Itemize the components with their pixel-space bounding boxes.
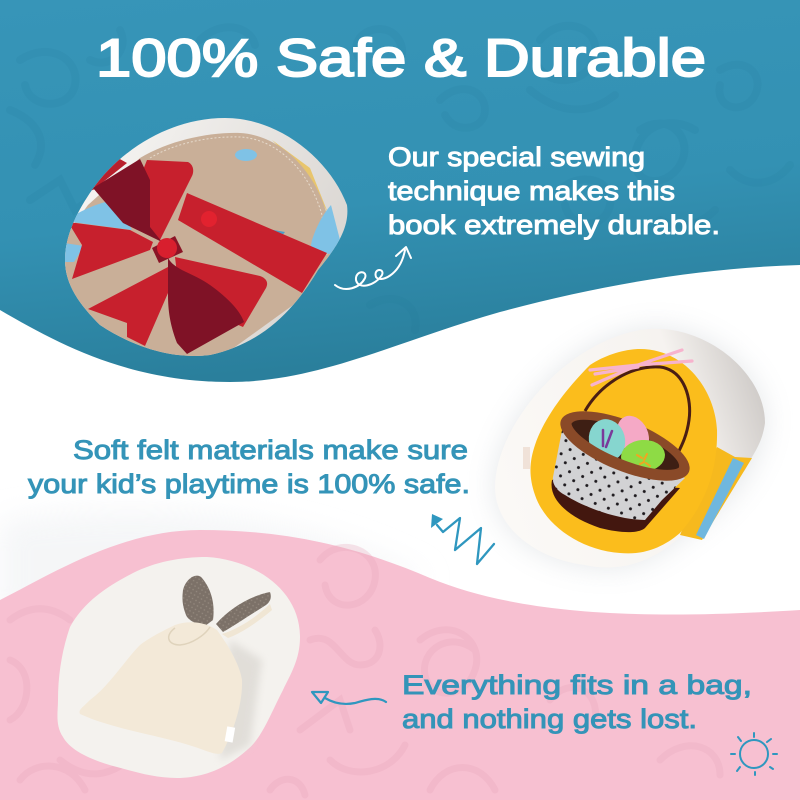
body text 1 bbox=[388, 142, 720, 240]
red ribbon band bbox=[178, 193, 327, 293]
left ear bbox=[182, 576, 214, 626]
green egg bbox=[620, 438, 666, 474]
body text 3: and nothing gets lost. bbox=[402, 704, 697, 734]
green egg marks bbox=[637, 454, 650, 466]
faint grey tint in middle section bbox=[0, 511, 430, 620]
body text 2 bbox=[28, 435, 470, 499]
red strip top left bbox=[92, 159, 127, 190]
photo 2: yellow egg page with basket in blob bbox=[495, 329, 765, 568]
arrow: blue zigzag bbox=[431, 514, 494, 564]
basket base bbox=[552, 480, 680, 532]
yellow egg page bbox=[530, 349, 717, 553]
basket dotted body bbox=[553, 425, 685, 520]
blob bbox=[495, 329, 765, 568]
body text 1: Our special sewing bbox=[388, 142, 645, 172]
arrow: white curly bbox=[335, 247, 411, 289]
bag shadow bbox=[220, 640, 262, 760]
bag tag bbox=[225, 726, 235, 743]
pink egg bbox=[611, 411, 655, 459]
pink bottom wave bbox=[0, 530, 800, 800]
cotton bag bbox=[79, 622, 242, 754]
blue doodle pattern bbox=[10, 26, 790, 330]
body text 3: Everything fits in a bag, bbox=[402, 670, 752, 700]
yellow page edge bbox=[272, 140, 337, 250]
body text 2: your kid’s playtime is 100% safe. bbox=[28, 469, 470, 499]
title: 100% Safe & Durable bbox=[96, 29, 706, 88]
centre button bbox=[157, 238, 177, 258]
body text 2: Soft felt materials make sure bbox=[73, 435, 468, 465]
icon: sun bbox=[731, 733, 777, 775]
teal egg bbox=[584, 415, 630, 465]
yellow tab bbox=[680, 447, 752, 540]
photo 1: felt page with red bow in blob bbox=[65, 118, 348, 356]
basket rim back bbox=[552, 397, 698, 495]
snap button bbox=[201, 211, 217, 227]
bow knot bbox=[152, 236, 183, 263]
photo 3: cotton bag with ears in blob bbox=[57, 557, 300, 778]
upper bow wing bbox=[144, 160, 194, 240]
pink doodle pattern bbox=[10, 547, 720, 795]
body text 1: book extremely durable. bbox=[388, 210, 720, 240]
arrow: blue hand-drawn left bbox=[312, 692, 386, 704]
right ear lining bbox=[222, 604, 272, 638]
body text 3 bbox=[402, 670, 752, 734]
basket interior bbox=[565, 409, 685, 483]
left ribbon tail bbox=[68, 222, 153, 279]
lower left ribbon tail bbox=[88, 267, 168, 346]
beige felt page bbox=[55, 133, 335, 365]
pink ribbon bow bbox=[590, 350, 692, 385]
blue header wave bbox=[0, 0, 800, 382]
tag bbox=[523, 447, 530, 469]
lower right bow wing bbox=[175, 257, 267, 327]
body text 1: technique makes this bbox=[388, 176, 675, 206]
photo 2 shadow bbox=[495, 329, 765, 568]
stitching bbox=[150, 137, 327, 255]
basket handle bbox=[585, 367, 690, 453]
right ear bbox=[216, 592, 271, 632]
blue tab strip bbox=[696, 458, 744, 539]
egg marks bbox=[603, 430, 612, 447]
rim front bbox=[567, 423, 683, 474]
blue window hole bbox=[235, 149, 257, 161]
blue felt pieces bbox=[64, 200, 132, 262]
lower dark bow wing bbox=[168, 258, 244, 354]
drawstring bbox=[169, 627, 210, 645]
blob bbox=[57, 557, 300, 778]
